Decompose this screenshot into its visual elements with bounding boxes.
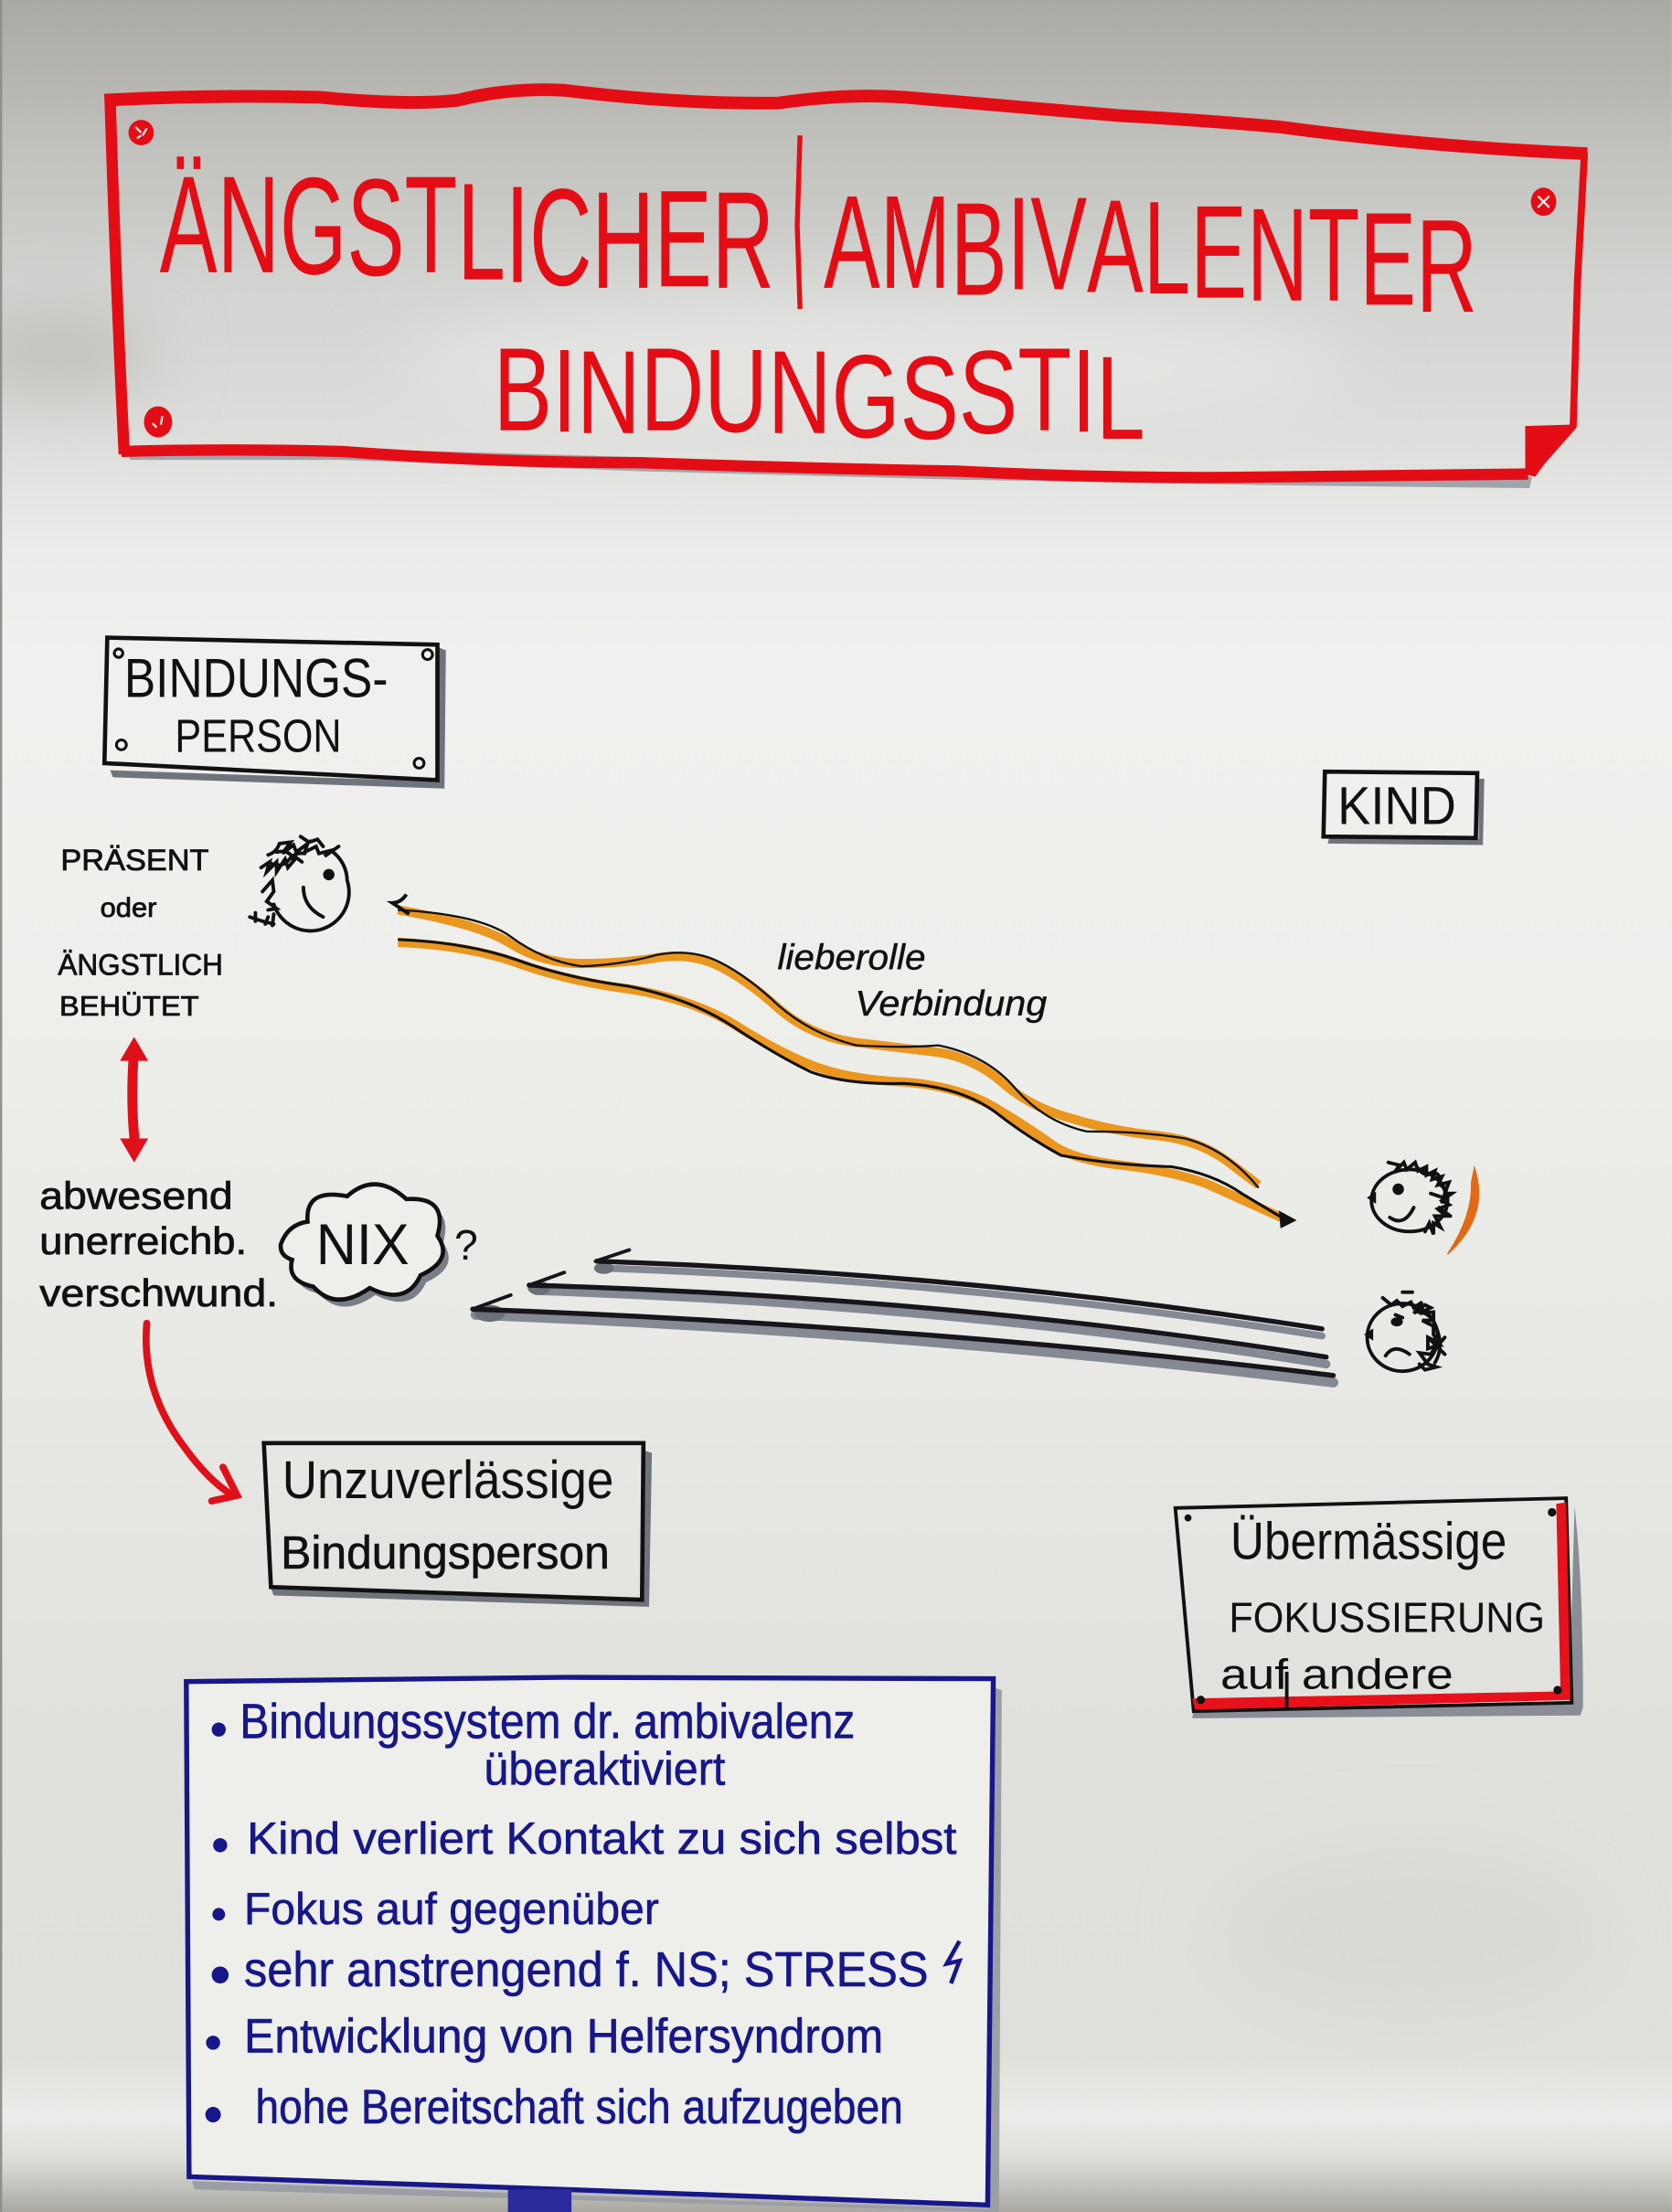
box: unzuverlässige Bindungsperson: Unzuverlässige	[282, 1451, 613, 1510]
arrows: black lines back to caregiver	[473, 1250, 1334, 1382]
icon: happy child face	[1370, 1163, 1452, 1234]
box: Kind heading: KIND	[1337, 776, 1456, 835]
text block: präsent oder ängstlich behütet: oder	[101, 893, 157, 923]
box: übermässige Fokussierung auf andere	[1176, 1498, 1583, 1718]
text block: präsent oder ängstlich behütet	[58, 844, 223, 1022]
box: Kind heading	[1324, 771, 1485, 845]
box: übermässige Fokussierung auf andere: FOKUSSIERUNG	[1229, 1594, 1545, 1642]
text block: abwesend unerreichbar verschwunden	[39, 1175, 278, 1314]
bullet list: Entwicklung von Helfersyndrom	[244, 2011, 883, 2064]
corner markers	[129, 120, 1556, 437]
box: unzuverlässige Bindungsperson: Bindungsperson	[281, 1526, 610, 1579]
label: liebevolle Verbindung	[777, 938, 1048, 1024]
title line 1 left: ÄNGSTLICHER	[160, 147, 774, 317]
frame	[110, 99, 124, 454]
bullet list: Bindungssystem dr. ambivalenz	[240, 1694, 855, 1749]
box: Bindungsperson heading: PERSON	[175, 710, 342, 762]
icon: thought cloud NIX: NIX	[316, 1213, 410, 1277]
tab: blue marker at bottom edge	[508, 2189, 571, 2212]
box: übermässige Fokussierung auf andere: auf andere	[1220, 1650, 1454, 1697]
icon: thought cloud NIX	[281, 1185, 478, 1307]
text block: abwesend unerreichbar verschwunden: abwesend	[39, 1175, 233, 1218]
text block: abwesend unerreichbar verschwunden: verschwund.	[39, 1271, 278, 1314]
text block: präsent oder ängstlich behütet: PRÄSENT	[60, 844, 209, 877]
icon: orange arc	[1448, 1168, 1478, 1254]
title line 2: BINDUNGSSTIL	[494, 324, 1145, 464]
box: Bindungsperson heading: BINDUNGS-	[124, 647, 388, 708]
bullet list: hohe Bereitschaft sich aufzugeben	[255, 2081, 903, 2134]
frame shadow	[130, 449, 1532, 488]
ribbon: liebevolle Verbindung	[392, 894, 1295, 1228]
panel: summary list	[186, 1677, 1002, 2212]
icon: thought cloud NIX: ?	[454, 1221, 478, 1269]
text block: präsent oder ängstlich behütet: ÄNGSTLICH	[58, 948, 223, 981]
box: Bindungsperson heading	[104, 638, 446, 789]
text block: abwesend unerreichbar verschwunden: unerreichb.	[39, 1219, 247, 1262]
box: unzuverlässige Bindungsperson	[264, 1443, 652, 1607]
label: liebevolle Verbindung: Verbindung	[855, 984, 1048, 1024]
bullet list: Fokus auf gegenüber	[244, 1884, 659, 1934]
title banner	[104, 90, 1587, 488]
text block: präsent oder ängstlich behütet: BEHÜTET	[59, 990, 199, 1022]
icon: happy face caregiver	[250, 836, 349, 931]
arrow: red arrow to unzuverlässige Bindungsperson	[146, 1324, 237, 1501]
arrow: red double arrow	[120, 1037, 148, 1163]
box: übermässige Fokussierung auf andere: Übermässige	[1230, 1512, 1507, 1570]
label: liebevolle Verbindung: lieberolle	[777, 938, 926, 977]
bullet list: überaktiviert	[484, 1742, 725, 1794]
bullet list: Kind verliert Kontakt zu sich selbst	[247, 1813, 957, 1864]
icon: sad child face	[1368, 1292, 1444, 1371]
title line 1 right: AMBIVALENTER	[824, 168, 1477, 340]
bullet list	[206, 1694, 960, 2134]
bullet list: sehr anstrengend f. NS; STRESS	[244, 1942, 929, 1997]
